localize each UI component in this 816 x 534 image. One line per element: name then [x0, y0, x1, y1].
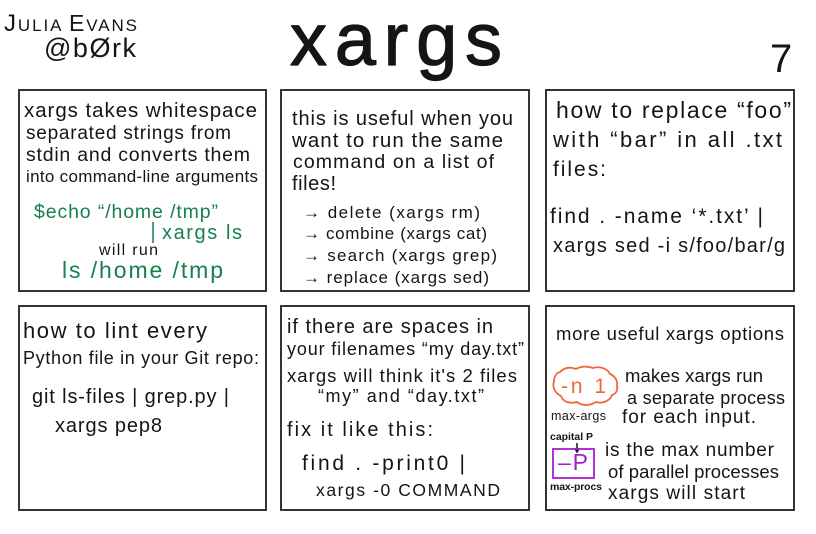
option: -P box: –P: [558, 449, 588, 475]
problem text: if there are spaces in: [287, 316, 493, 338]
author credit: @bØrk: [44, 33, 136, 63]
question text: Python file in your Git repo:: [23, 348, 259, 368]
command: xargs sed -i s/foo/bar/g: [553, 235, 785, 257]
description text: [24, 99, 258, 186]
intro text: [291, 108, 513, 195]
problem text: [287, 316, 524, 406]
max-args label: max-args: [551, 409, 606, 423]
resulting command: ls /home /tmp: [62, 257, 223, 283]
panel: replace foo with bar: [546, 90, 794, 291]
-n description: makes xargs run: [625, 365, 763, 386]
list of uses: → delete (xargs rm): [303, 203, 480, 222]
-n description: [622, 365, 785, 428]
-n description: for each input.: [622, 407, 756, 428]
list of uses: → search (xargs grep): [303, 246, 497, 265]
example command: $echo “/home /tmp”: [34, 201, 218, 223]
command: git ls-files | grep.py |: [32, 386, 229, 408]
panel: useful for lists of files: [281, 90, 529, 291]
title: xargs: [290, 0, 502, 81]
intro text: files!: [292, 173, 336, 195]
question text: files:: [553, 158, 606, 181]
question text: [552, 97, 791, 181]
option: -n 1 cloud: [553, 367, 617, 405]
description text: separated strings from: [26, 123, 231, 144]
page number: 7: [770, 37, 792, 81]
command: xargs pep8: [55, 415, 162, 437]
-P description: xargs will start: [608, 483, 746, 504]
list of uses: → combine (xargs cat): [303, 224, 487, 243]
panel: lint python files: [19, 306, 266, 510]
intro text: command on a list of: [293, 151, 495, 173]
-P description: of parallel processes: [608, 461, 779, 482]
will run label: will run: [98, 242, 158, 259]
intro text: want to run the same: [291, 129, 503, 152]
list of uses: → replace (xargs sed): [303, 268, 489, 287]
-P description: [605, 440, 779, 504]
-P description: is the max number: [605, 440, 775, 461]
problem text: “my” and “day.txt”: [318, 386, 484, 406]
capital P note: capital P: [550, 431, 593, 443]
fixed command: find . -print0 |: [302, 452, 465, 475]
question text: how to replace “foo”: [556, 97, 791, 123]
list of uses: [303, 203, 497, 287]
question text: with “bar” in all .txt: [552, 127, 782, 152]
panel: what xargs does: [19, 90, 266, 291]
author credit: JULIA EVANS: [4, 10, 137, 37]
example command: xargs ls: [162, 222, 242, 244]
panel: spaces in filenames: [281, 306, 529, 510]
command: [550, 205, 785, 257]
fixed command: xargs -0 COMMAND: [316, 480, 500, 500]
description text: stdin and converts them: [26, 144, 250, 166]
option: -n 1 cloud: -n 1: [561, 375, 606, 398]
panel heading: more useful xargs options: [556, 323, 784, 344]
max-procs label: max-procs: [550, 481, 602, 493]
command: [32, 386, 229, 437]
-n description: a separate process: [627, 388, 785, 408]
description text: xargs takes whitespace: [24, 99, 257, 122]
fixed command: [302, 452, 500, 500]
panel: more options: [546, 306, 794, 510]
author credit: [4, 10, 137, 63]
arrow to P: [574, 443, 580, 452]
question text: [23, 318, 259, 368]
problem text: xargs will think it's 2 files: [287, 365, 517, 386]
problem text: your filenames “my day.txt”: [287, 339, 524, 359]
option: -P box: [553, 449, 594, 478]
intro text: this is useful when you: [292, 108, 513, 130]
command: find . -name ‘*.txt’ |: [550, 205, 763, 228]
fix heading: fix it like this:: [287, 419, 433, 441]
description text: into command-line arguments: [26, 167, 258, 186]
question text: how to lint every: [23, 318, 207, 343]
example command: [34, 201, 242, 244]
